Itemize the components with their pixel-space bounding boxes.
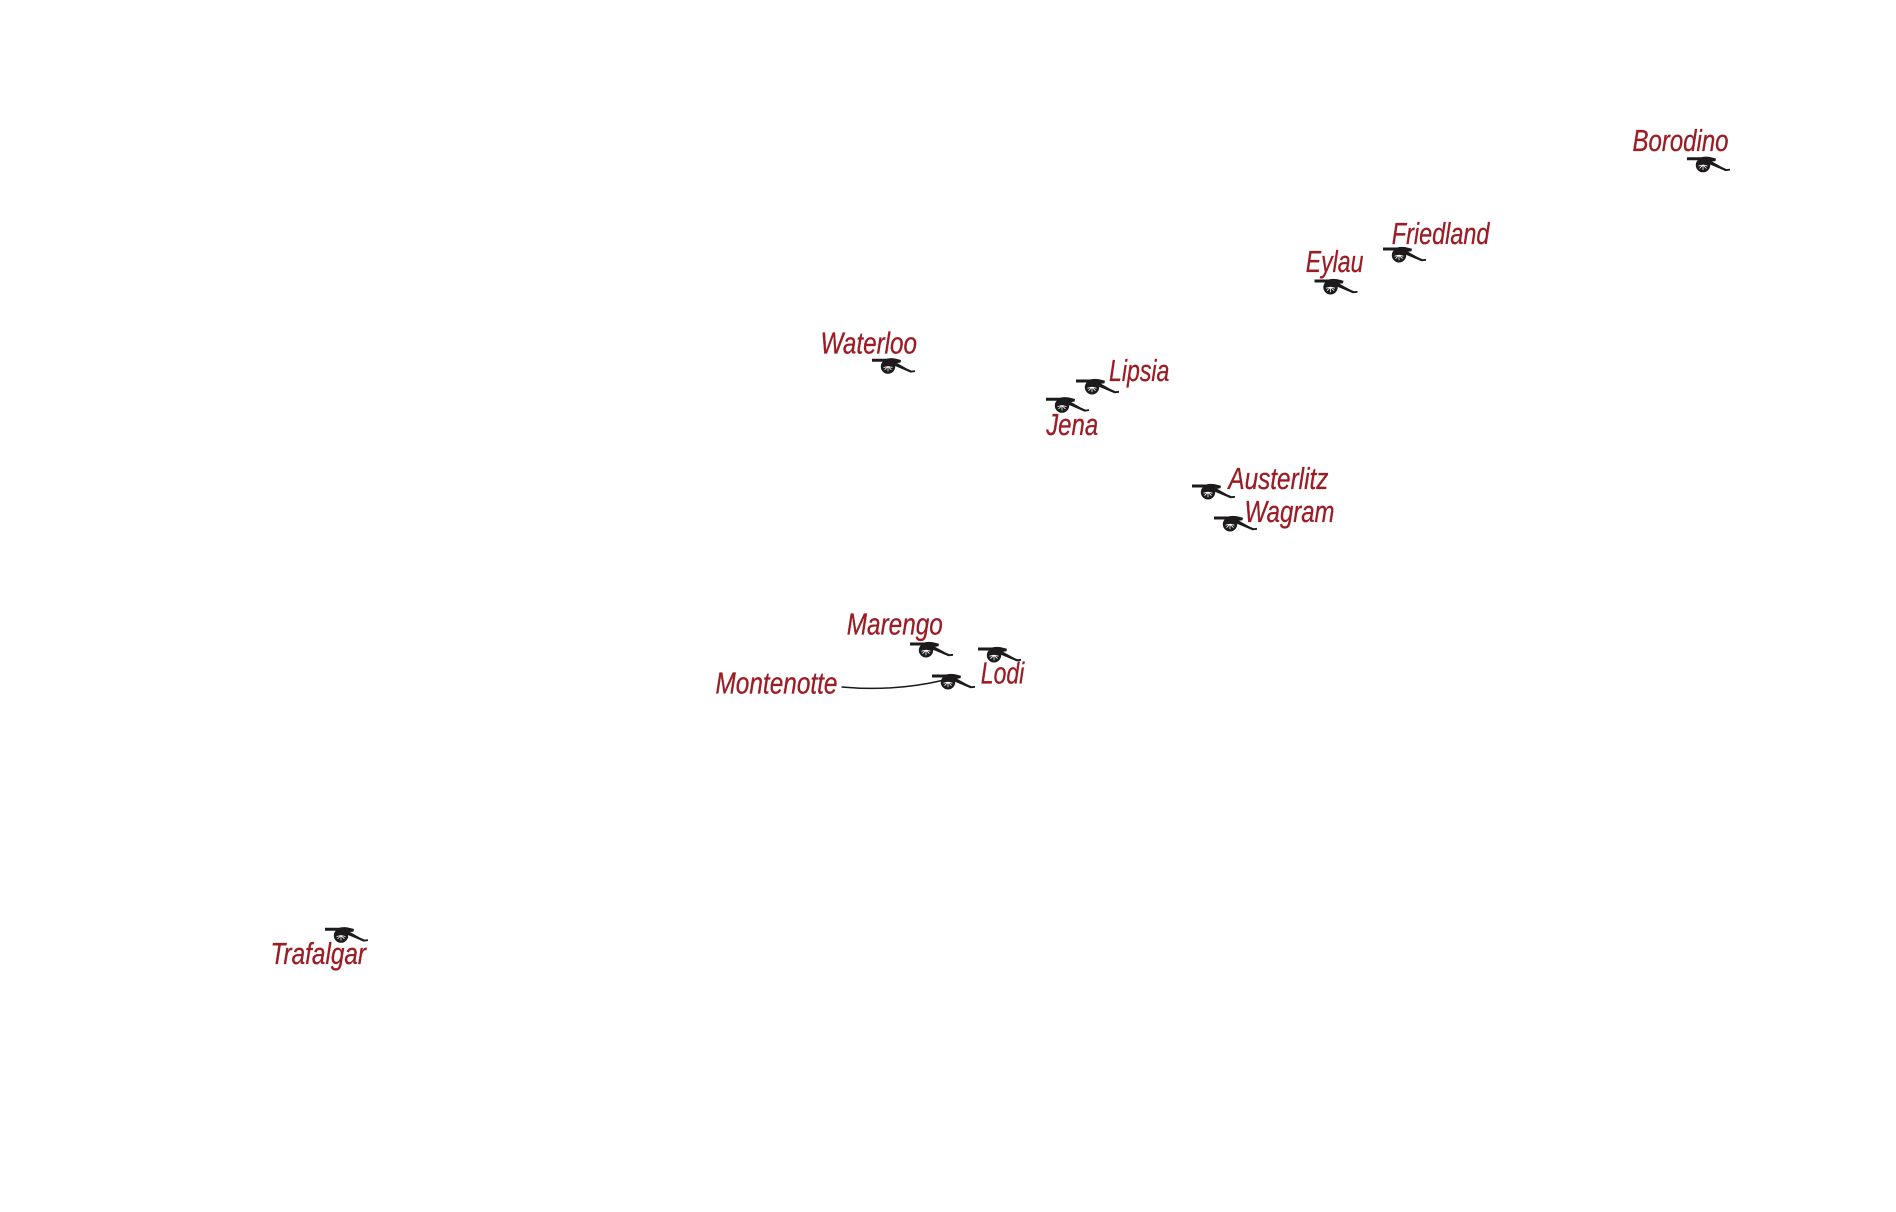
battle: Montenotte — [716, 666, 975, 700]
icon: cannon — [1383, 247, 1426, 262]
label: Trafalgar: Trafalgar — [270, 937, 367, 971]
battle: Wagram — [1214, 495, 1334, 532]
label: Austerlitz: Austerlitz — [1227, 462, 1328, 496]
battle: Trafalgar — [270, 927, 368, 971]
leader line — [842, 680, 942, 688]
battle: Marengo — [847, 608, 953, 658]
label: Marengo: Marengo — [847, 608, 943, 642]
battle: Friedland — [1383, 217, 1490, 262]
label: Jena: Jena — [1045, 408, 1098, 442]
icon: cannon — [978, 647, 1021, 662]
label: Lodi: Lodi — [981, 656, 1025, 690]
icon: cannon — [1687, 157, 1730, 172]
icon: cannon — [1076, 379, 1119, 394]
icon: cannon — [1192, 484, 1235, 500]
icon: cannon — [910, 642, 953, 658]
icon: cannon — [1046, 397, 1089, 413]
label: Montenotte: Montenotte — [716, 666, 838, 700]
icon: cannon — [1314, 279, 1358, 294]
battle: Lodi — [978, 647, 1025, 690]
battle: Eylau — [1306, 245, 1363, 294]
battle: Jena — [1045, 397, 1098, 442]
battle: Lipsia — [1076, 354, 1169, 394]
icon: cannon — [932, 674, 975, 690]
battle: Austerlitz — [1192, 462, 1328, 500]
icon: cannon — [1214, 516, 1257, 532]
label: Friedland: Friedland — [1392, 217, 1490, 251]
label: Borodino: Borodino — [1632, 124, 1728, 158]
label: Lipsia: Lipsia — [1109, 354, 1169, 388]
label: Wagram: Wagram — [1244, 495, 1334, 529]
battle: Borodino — [1632, 124, 1730, 172]
icon: cannon — [325, 927, 368, 943]
battle: Waterloo — [820, 326, 917, 374]
icon: cannon — [872, 358, 915, 374]
label: Waterloo: Waterloo — [820, 326, 917, 360]
label: Eylau: Eylau — [1306, 245, 1363, 279]
